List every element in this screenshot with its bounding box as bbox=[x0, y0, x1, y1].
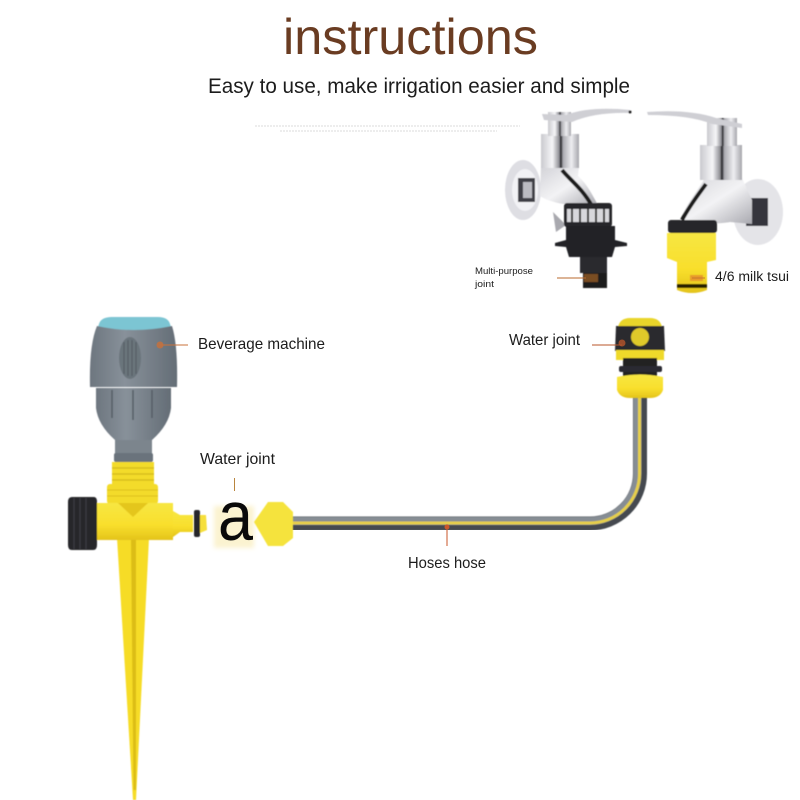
right hose connector bbox=[615, 318, 665, 398]
sprinkler bbox=[68, 317, 207, 800]
pointer: multi-purpose joint bbox=[557, 277, 586, 279]
label: hoses hose: Hoses hose bbox=[408, 555, 486, 572]
pointer: beverage machine bbox=[156, 342, 188, 348]
subtitle: Easy to use, make irrigation easier and simple bbox=[208, 75, 630, 98]
pointer: water joint right bbox=[592, 340, 626, 346]
spike bbox=[117, 538, 149, 800]
label: water joint right: Water joint bbox=[509, 332, 581, 349]
label: multi-purpose joint: Multi-purpose bbox=[475, 266, 533, 277]
right faucet with yellow joint bbox=[647, 111, 783, 293]
faint fine print lines bbox=[255, 126, 520, 131]
label: multi-purpose joint bbox=[474, 266, 533, 290]
black end cap bbox=[68, 497, 97, 550]
pointer: hoses hose bbox=[444, 524, 450, 546]
label: beverage machine: Beverage machine bbox=[198, 336, 325, 353]
yellow body bbox=[97, 462, 207, 540]
water joint connector (blurred) bbox=[214, 502, 293, 548]
sprinkler cap bbox=[90, 317, 177, 462]
letter a: a bbox=[218, 477, 253, 555]
pointer: water joint left bbox=[234, 478, 236, 491]
left faucet with multi-purpose joint bbox=[505, 109, 632, 288]
title: instructions bbox=[283, 9, 538, 65]
label: multi-purpose joint: joint bbox=[474, 279, 494, 290]
pointer: 4/6 milk tsui bbox=[692, 277, 705, 279]
label: water joint left: Water joint bbox=[200, 451, 276, 468]
label: 4/6 milk tsui: 4/6 milk tsui bbox=[715, 269, 789, 284]
hose bbox=[290, 395, 640, 524]
